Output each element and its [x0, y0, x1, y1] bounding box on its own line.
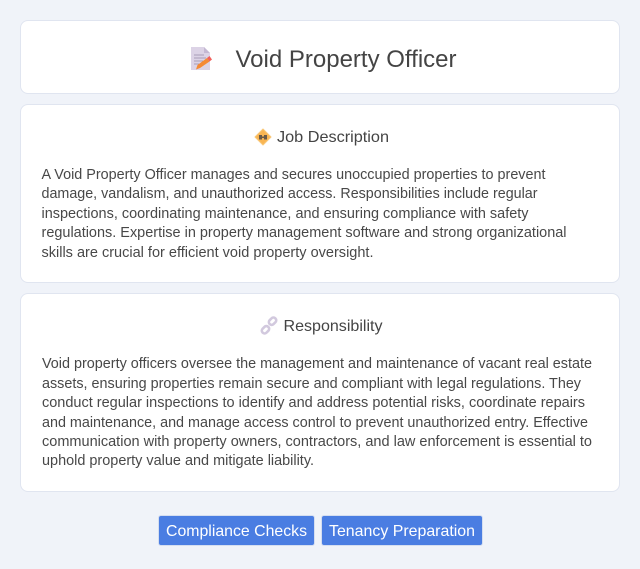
icon: document with pencil — [191, 47, 212, 70]
text block: responsibility: assets, ensuring properties remain secure and compliant with legal regulations. They — [42, 376, 582, 392]
icon: orange diamond sign — [254, 128, 272, 146]
title: Void Property Officer — [236, 46, 456, 73]
text block: job description: skills are crucial for efficient void property oversight. — [42, 245, 374, 261]
text block: job description: A Void Property Officer manages and secures unoccupied properties to prevent — [42, 167, 546, 183]
text block: responsibility: conduct regular inspections to identify and address potential risks, coordinate repairs — [42, 395, 585, 411]
text block: job description: regulations. Expertise in property management software and strong organizational — [42, 225, 566, 241]
panel: title card — [20, 20, 620, 94]
panel: responsibility — [20, 293, 620, 492]
heading: responsibility: Responsibility — [284, 318, 382, 335]
text block: responsibility: Void property officers oversee the management and maintenance of vacant real estate — [42, 356, 592, 372]
tag: compliance checks — [159, 516, 314, 545]
text block: responsibility: and maintenance, and manage access control to prevent unauthorized entry. Effective — [42, 415, 588, 431]
panel: job description — [20, 104, 620, 283]
heading: job description: Job Description — [277, 129, 389, 146]
text block: responsibility: uphold property value and mitigate liability. — [42, 453, 314, 469]
text block: job description — [42, 167, 566, 261]
icon: chain link — [260, 316, 278, 335]
text block: job description: damage, vandalism, and unauthorized access. Responsibilities include regular — [42, 186, 538, 202]
tag: tenancy preparation — [322, 516, 482, 545]
tag: tenancy preparation: Tenancy Preparation — [329, 523, 475, 540]
text block: responsibility: communication with property owners, contractors, and law enforcement is essential to — [42, 434, 592, 450]
text block: responsibility — [42, 356, 592, 469]
text block: job description: inspections, coordinating maintenance, and ensuring compliance with safety — [42, 206, 529, 222]
tag: compliance checks: Compliance Checks — [166, 523, 307, 540]
